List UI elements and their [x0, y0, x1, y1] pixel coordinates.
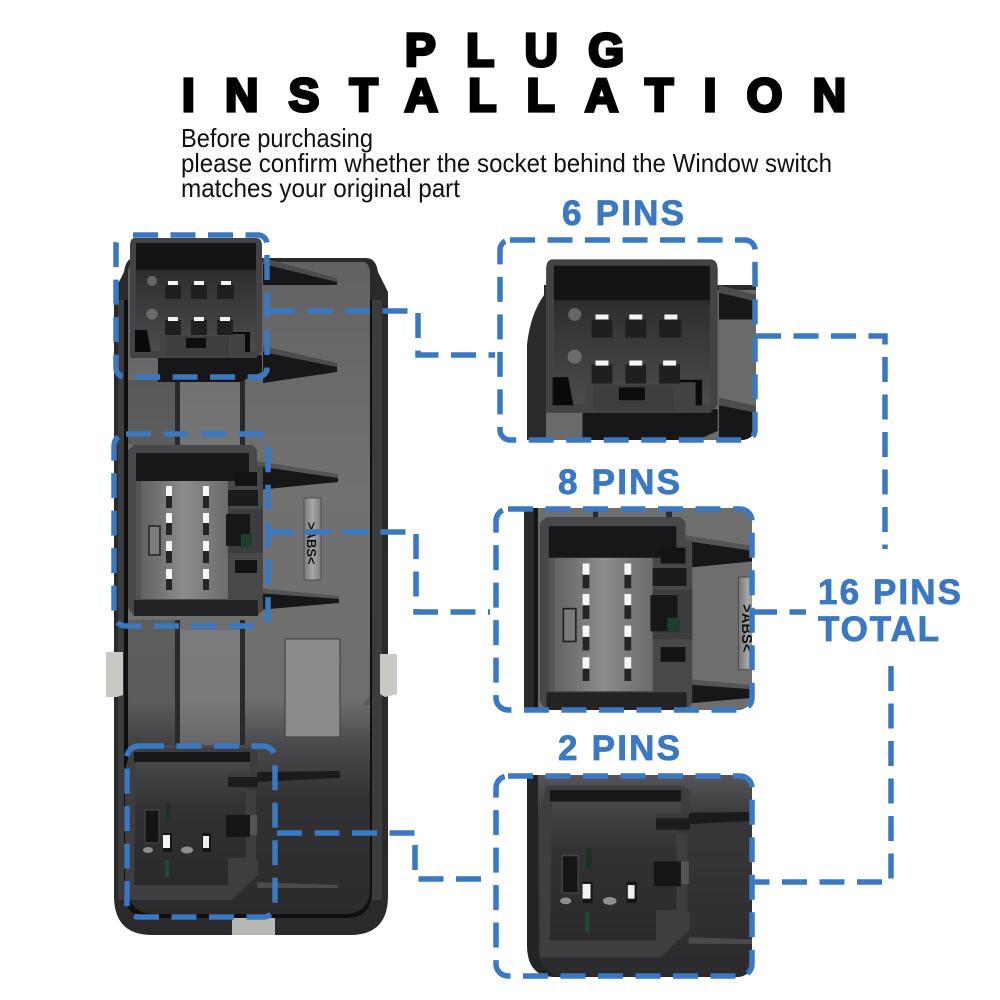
intro text block: Before purchasing	[181, 123, 373, 153]
frame: 6 pins panel	[500, 240, 755, 440]
arrow: connector line 6 pins	[270, 311, 495, 355]
connector: 8 pins: >ABS<	[304, 522, 319, 565]
connector: 8 pins	[128, 445, 339, 616]
panel: 6 pins close-up	[527, 259, 756, 440]
callout box: 8 pins on switch	[114, 434, 268, 626]
metal plate	[285, 639, 340, 737]
callout box: 6 pins on switch	[116, 235, 267, 377]
heading: 8 pins: 8 PINS	[558, 463, 680, 502]
panel: 8 pins close-up	[524, 508, 752, 710]
intro text block	[181, 123, 832, 203]
title: PLUG	[405, 24, 624, 76]
heading: 2 pins: 2 PINS	[558, 729, 680, 768]
window switch photo	[106, 238, 397, 935]
heading: 6 pins: 6 PINS	[562, 194, 684, 233]
arrow: connector line 2 pins	[277, 833, 490, 879]
side and bottom clips	[106, 652, 397, 935]
arrow: connector line 8 pins	[268, 532, 490, 612]
connector: 2 pins	[125, 748, 340, 900]
heading: 16 pins total: TOTAL	[818, 610, 939, 649]
frame: 8 pins panel	[496, 509, 752, 710]
arrow: total line middle	[752, 609, 806, 615]
switch body	[114, 258, 388, 935]
heading: 16 pins total	[818, 573, 961, 649]
title: INSTALLATION	[182, 69, 846, 121]
panel: 2 pins close-up	[527, 775, 752, 977]
arrow: total line upper	[756, 336, 885, 549]
intro text block: matches your original part	[181, 173, 461, 203]
heading: 16 pins total: 16 PINS	[818, 573, 961, 612]
callout box: 2 pins on switch	[127, 746, 275, 917]
frame: 2 pins panel	[496, 776, 752, 976]
connector: 6 pins	[130, 238, 337, 383]
title	[182, 24, 846, 121]
arrow: total line lower	[752, 666, 891, 882]
intro text block: please confirm whether the socket behind the Window switch	[181, 148, 832, 178]
